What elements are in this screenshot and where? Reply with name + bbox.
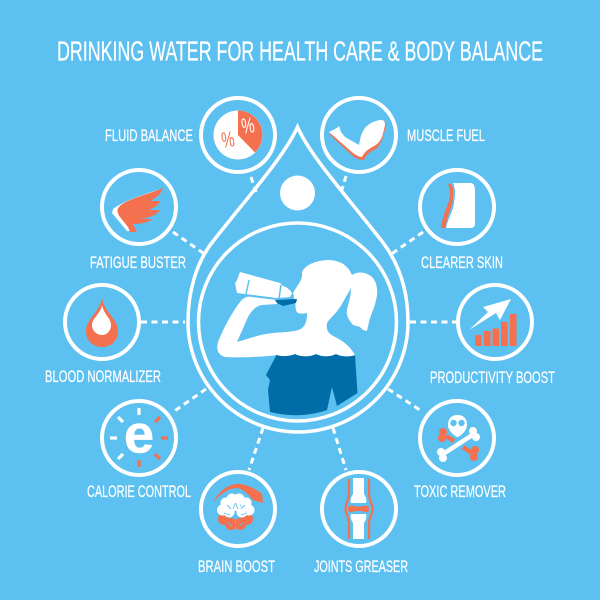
body silhouette <box>217 260 377 357</box>
panel: blood normalizer <box>65 285 139 359</box>
icon: percent pie: % <box>240 112 256 139</box>
panel: fluid balance <box>201 98 275 172</box>
connector: toxic remover <box>388 389 423 412</box>
connector: productivity boost <box>410 320 456 324</box>
label: brain boost: BRAIN BOOST <box>198 557 275 576</box>
label: blood normalizer: BLOOD NORMALIZER <box>45 367 161 386</box>
panel: productivity boost <box>458 285 532 359</box>
label: toxic remover: TOXIC REMOVER <box>414 482 506 501</box>
panel: joints greaser <box>322 472 396 546</box>
panel: calorie control <box>102 401 176 475</box>
connector: clearer skin <box>390 232 423 255</box>
icon: skull and crossbones <box>437 415 480 462</box>
label: muscle fuel: MUSCLE FUEL <box>407 126 485 145</box>
central water drop <box>188 127 408 432</box>
label: fatigue buster: FATIGUE BUSTER <box>90 253 186 272</box>
label: calorie control: CALORIE CONTROL <box>87 482 191 501</box>
water in the mouth <box>275 299 297 306</box>
icon: skin layer <box>441 183 475 228</box>
connector: fluid balance <box>251 177 256 192</box>
panel: fatigue buster <box>102 170 176 244</box>
label: joints greaser: JOINTS GREASER <box>314 557 408 576</box>
icon: wing <box>112 188 163 232</box>
icon: percent pie <box>214 110 262 160</box>
connector: fatigue buster <box>173 232 206 255</box>
icon: blood drop <box>86 298 118 347</box>
panel: clearer skin <box>420 170 494 244</box>
icon: rising bars and arrow <box>469 299 516 346</box>
icon: percent pie: % <box>220 126 236 153</box>
panel: toxic remover <box>420 401 494 475</box>
woman drinking from a bottle <box>217 260 377 415</box>
panel: muscle fuel <box>322 98 396 172</box>
connector: joints greaser <box>333 428 346 470</box>
label: fluid balance: FLUID BALANCE <box>105 126 193 145</box>
connector: brain boost <box>249 428 263 470</box>
connector: calorie control <box>173 389 206 412</box>
icon: brain and arc arrow <box>213 484 263 530</box>
connector: muscle fuel <box>341 176 346 193</box>
label: clearer skin: CLEARER SKIN <box>421 253 503 272</box>
icon: knee joint <box>346 478 372 539</box>
panel: brain boost <box>201 472 275 546</box>
dark blue top <box>266 354 358 415</box>
icon: energy e with rays: e <box>124 404 154 464</box>
connector: blood normalizer <box>141 320 185 324</box>
bottle <box>235 272 292 298</box>
icon: flexed arm <box>329 120 386 160</box>
